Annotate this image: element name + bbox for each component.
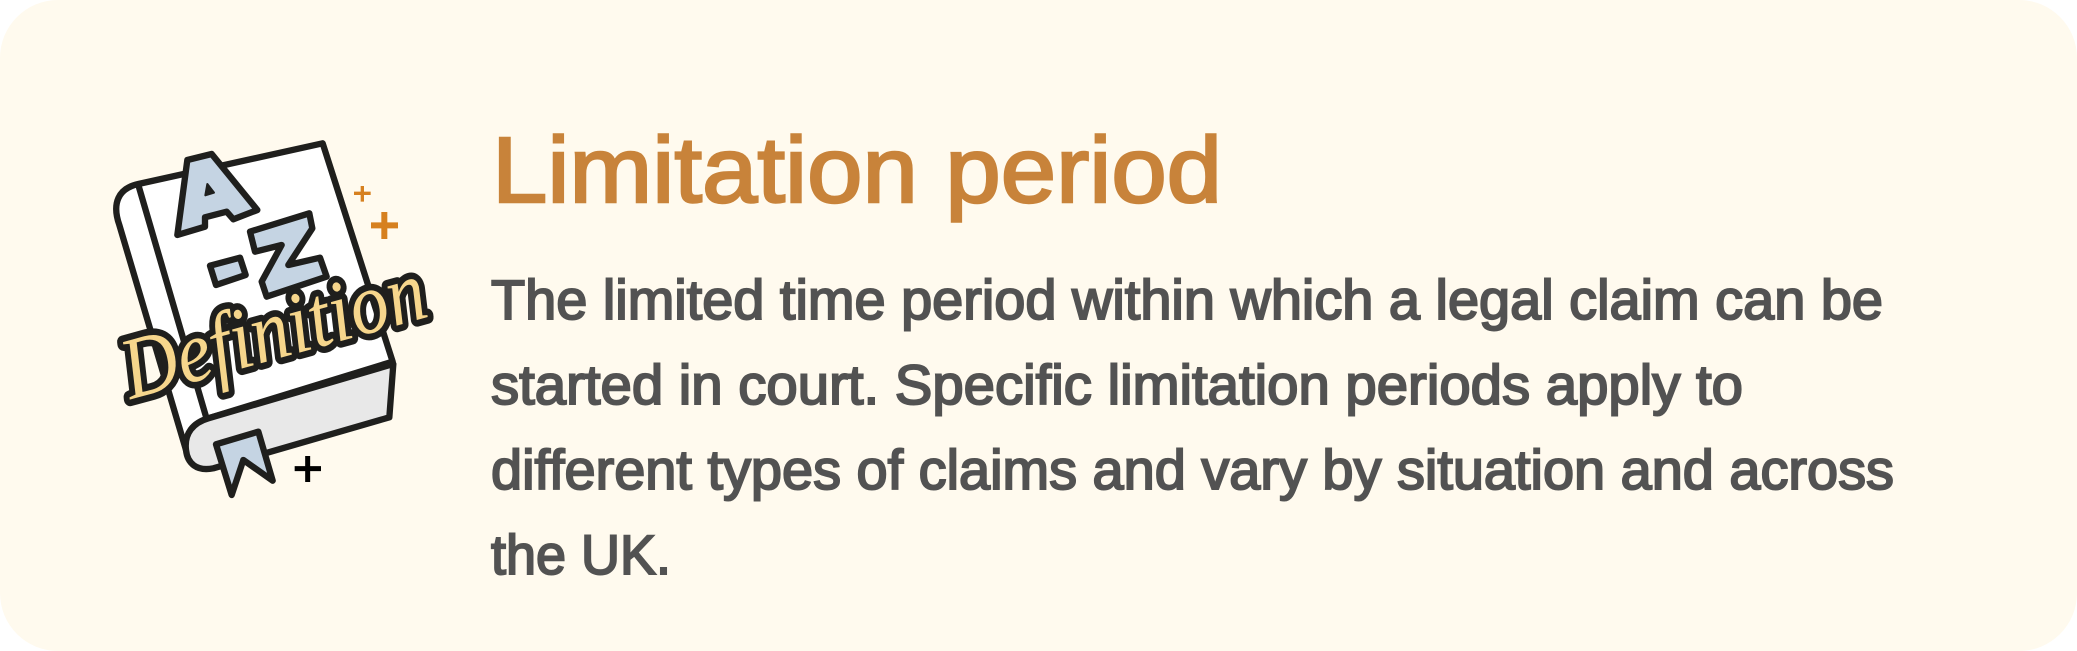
line 3: different types of claims and vary by situation and across	[491, 438, 1894, 501]
sparkle large orange	[371, 212, 398, 239]
line 2: started in court. Specific limitation periods apply to	[491, 353, 1743, 416]
definition script label: Definition	[109, 241, 436, 418]
body text	[491, 268, 1894, 586]
letter A counter	[205, 184, 214, 195]
line 1: The limited time period within which a legal claim can be	[491, 268, 1883, 331]
spine line	[138, 185, 206, 417]
icon: A-Z definition book	[109, 143, 436, 495]
bookmark	[216, 432, 273, 495]
title: Limitation period	[492, 118, 1222, 222]
book cover	[116, 143, 393, 450]
line 4: the UK.	[491, 523, 671, 586]
dash	[210, 258, 246, 285]
letter Z	[250, 213, 327, 297]
sparkle black	[295, 456, 321, 482]
letter A	[177, 154, 257, 235]
sparkle small orange	[354, 186, 371, 202]
book pages	[186, 364, 393, 469]
